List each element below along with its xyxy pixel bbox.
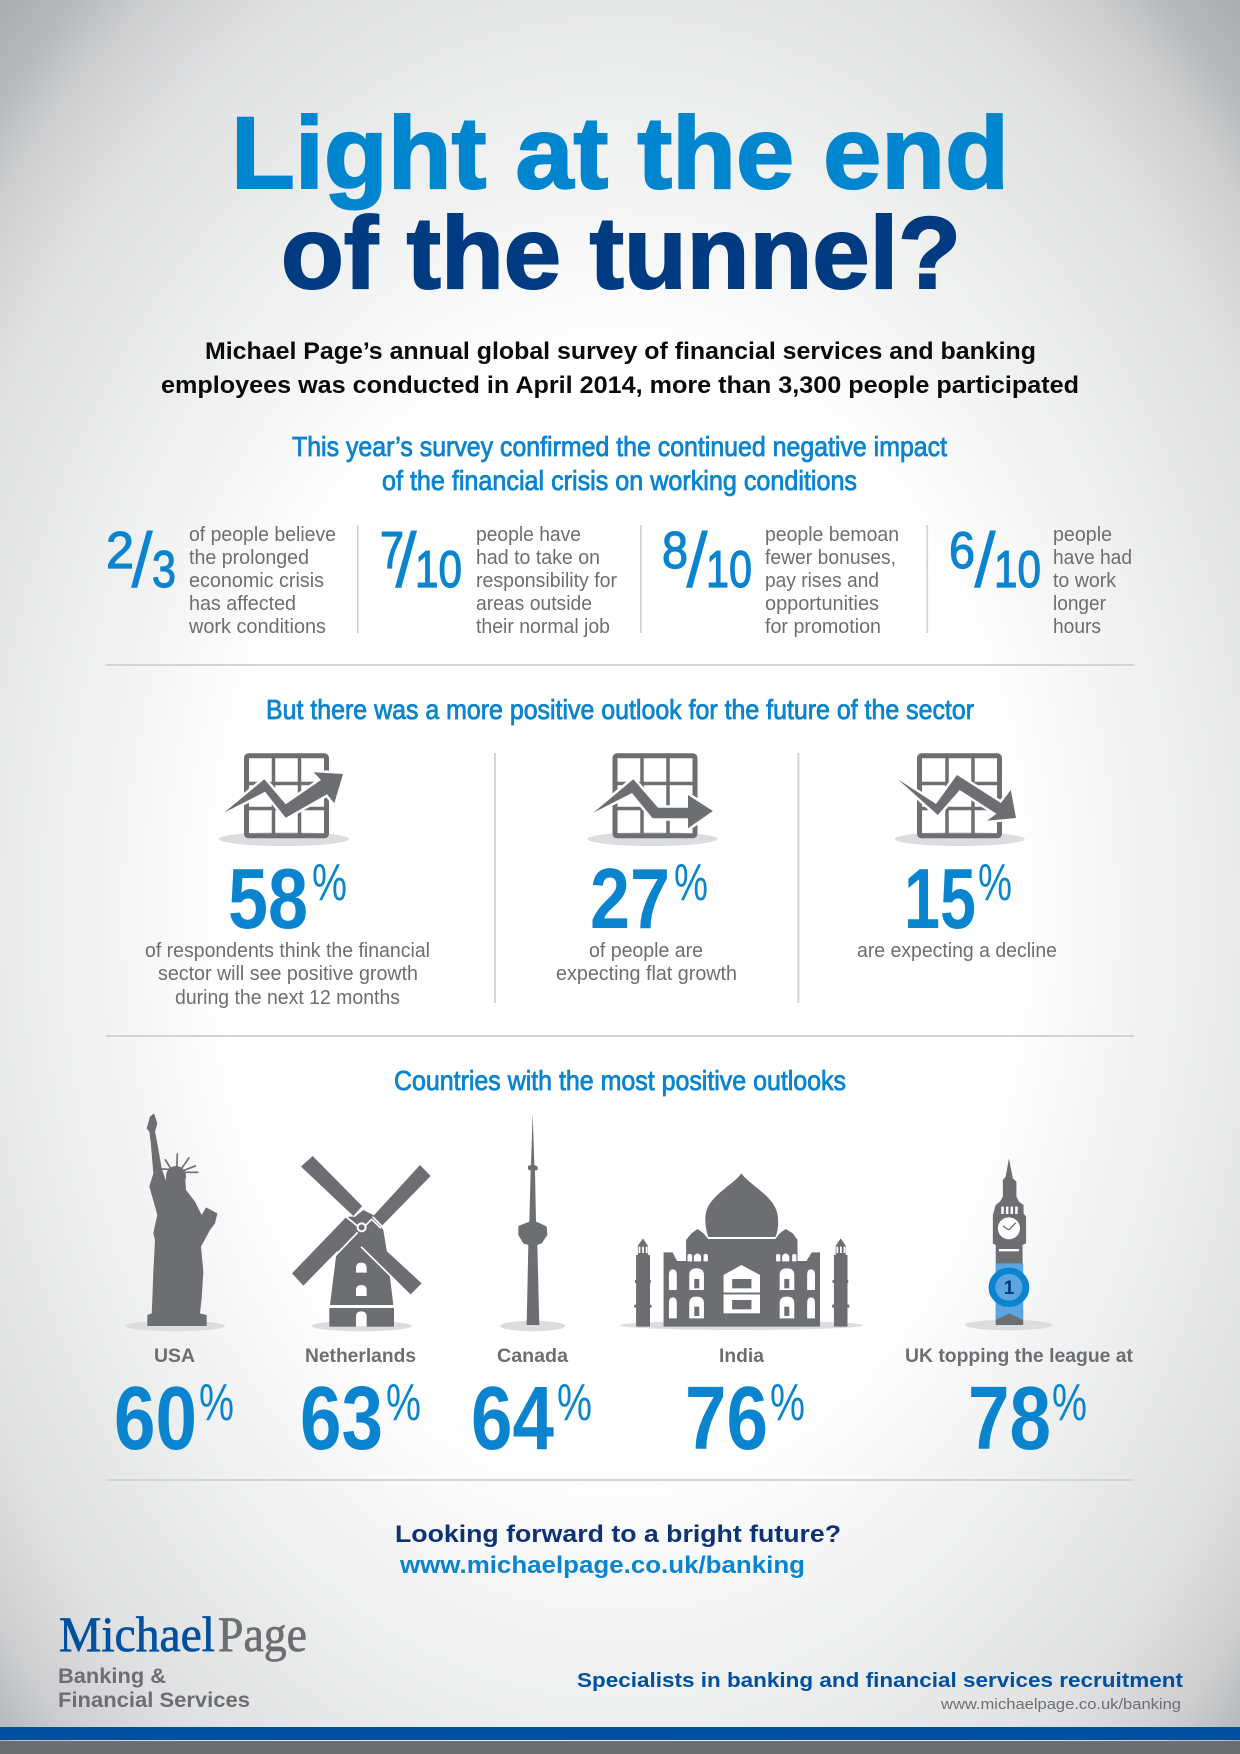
title: Light at the end (231, 96, 1009, 210)
panel: 15 percent decline (857, 756, 1057, 962)
label: Canada: Canada (497, 1346, 568, 1367)
stat: 2/3: the prolonged (189, 547, 309, 569)
figure: UK 78%: % (1052, 1374, 1087, 1432)
call to action (395, 1521, 841, 1579)
stat: 7/10: had to take on (476, 547, 600, 569)
stat: 6/10: hours (1053, 616, 1101, 638)
stat: 7/10 (380, 516, 617, 638)
panel: 58 percent positive growth (145, 756, 430, 1009)
stat: 6/10: to work (1053, 570, 1117, 592)
title: of the tunnel? (281, 196, 961, 310)
stat: 2/3: / (131, 516, 153, 604)
stat: 8/10: people bemoan (765, 524, 899, 546)
title (231, 96, 1009, 310)
label: UK: UK topping the league at (905, 1346, 1134, 1367)
caption (145, 940, 430, 1009)
heading: negative impact: of the financial crisis on working conditions (382, 465, 857, 496)
caption: sector will see positive growth (158, 963, 418, 985)
logo: Michael Page: Page (218, 1606, 307, 1662)
intro text: Michael Page’s annual global survey of financial services and banking (205, 338, 1036, 365)
logo: Michael Page (58, 1606, 307, 1712)
figure: 58%: % (312, 854, 347, 912)
stat: 8/10: 10 (706, 541, 752, 599)
stat: 7/10: 10 (415, 541, 462, 599)
figure: 15%: 15 (904, 852, 976, 947)
stat: 7/10: 7 (380, 522, 404, 580)
stat: 7/10: areas outside (476, 593, 592, 615)
caption: of people are (589, 940, 703, 962)
call to action: Looking forward to a bright future? (395, 1521, 841, 1548)
caption: during the next 12 months (175, 987, 400, 1009)
icon: CN Tower (500, 1113, 565, 1331)
figure: India 76%: 76 (685, 1369, 768, 1469)
caption (556, 940, 737, 985)
icon: Big Ben with first-place rosette (965, 1158, 1053, 1330)
stat: 8/10: pay rises and (765, 570, 879, 592)
footer band (0, 1727, 1240, 1754)
icon: chart with falling arrow (895, 756, 1025, 846)
stat: 2/3: work conditions (188, 616, 326, 638)
stat: 8/10: / (686, 516, 708, 604)
stat: 7/10: / (395, 516, 417, 604)
stat: 2/3: economic crisis (189, 570, 324, 592)
stat: 6/10: have had (1053, 547, 1132, 569)
figure: 58%: 58 (228, 852, 308, 947)
stat: 8/10 (662, 516, 899, 638)
footer strapline: Specialists in banking and financial services recruitment (577, 1670, 1183, 1692)
stat: 8/10: opportunities (765, 593, 879, 615)
figure: India 76%: % (770, 1374, 805, 1432)
call to action: www.michaelpage.co.uk/banking (399, 1552, 805, 1579)
intro text (161, 338, 1079, 399)
heading: countries: Countries with the most positive outlooks (394, 1065, 846, 1096)
stat: 2/3: 3 (152, 541, 176, 599)
caption: expecting flat growth (556, 963, 737, 985)
intro text: employees was conducted in April 2014, more than 3,300 people participated (161, 372, 1079, 399)
stat: 2/3: 2 (106, 522, 134, 580)
stat: 8/10: for promotion (765, 616, 881, 638)
figure: 27%: % (674, 854, 708, 912)
icon: Statue of Liberty (125, 1113, 225, 1331)
figure: Netherlands 63%: % (386, 1374, 421, 1432)
icon: windmill (292, 1156, 431, 1331)
stat: 6/10: 10 (994, 541, 1041, 599)
heading: negative impact: This year’s survey confirmed the continued negative impact (292, 431, 947, 462)
figure: Netherlands 63%: 63 (300, 1369, 383, 1469)
icon: Taj Mahal (620, 1173, 863, 1330)
stat: 7/10: responsibility for (476, 570, 617, 592)
figure: Canada 64%: % (557, 1374, 592, 1432)
logo: Michael Page: Financial Services (58, 1689, 250, 1712)
heading: positive outlook: But there was a more positive outlook for the future of the sector (266, 694, 974, 725)
footer strapline: www.michaelpage.co.uk/banking (940, 1696, 1181, 1713)
figure: 27%: 27 (590, 852, 670, 947)
icon: chart with flat arrow (588, 756, 718, 846)
figure: USA 60%: % (199, 1374, 234, 1432)
stat: 2/3: has affected (189, 593, 296, 615)
label: India: India (719, 1346, 764, 1367)
stat: 7/10: their normal job (476, 616, 610, 638)
stat: 8/10: 8 (662, 522, 688, 580)
stat: 2/3 (106, 516, 336, 638)
caption: are expecting a decline (857, 940, 1057, 962)
rosette number: 1 (1004, 1278, 1015, 1299)
figure: Canada 64%: 64 (471, 1369, 554, 1469)
logo: Michael Page: Michael (59, 1606, 215, 1662)
footer strapline (577, 1670, 1183, 1713)
stat: 6/10: longer (1053, 593, 1106, 615)
panel: 27 percent flat growth (556, 756, 737, 985)
heading: negative impact (292, 431, 947, 496)
stat: 6/10: people (1053, 524, 1112, 546)
stat: 6/10 (949, 516, 1132, 638)
logo: Michael Page: Banking & (58, 1665, 166, 1688)
caption: of respondents think the financial (145, 940, 430, 962)
stat: 6/10: 6 (949, 522, 975, 580)
stat: 6/10: / (974, 516, 996, 604)
figure: UK 78%: 78 (968, 1369, 1051, 1469)
label: Netherlands: Netherlands (305, 1346, 416, 1367)
label: USA: USA (154, 1346, 195, 1367)
figure: USA 60%: 60 (114, 1369, 197, 1469)
icon: chart with rising arrow (219, 756, 349, 846)
figure: 15%: % (978, 854, 1012, 912)
stat: 7/10: people have (476, 524, 581, 546)
stat: 8/10: fewer bonuses, (765, 547, 896, 569)
stat: 2/3: of people believe (189, 524, 336, 546)
